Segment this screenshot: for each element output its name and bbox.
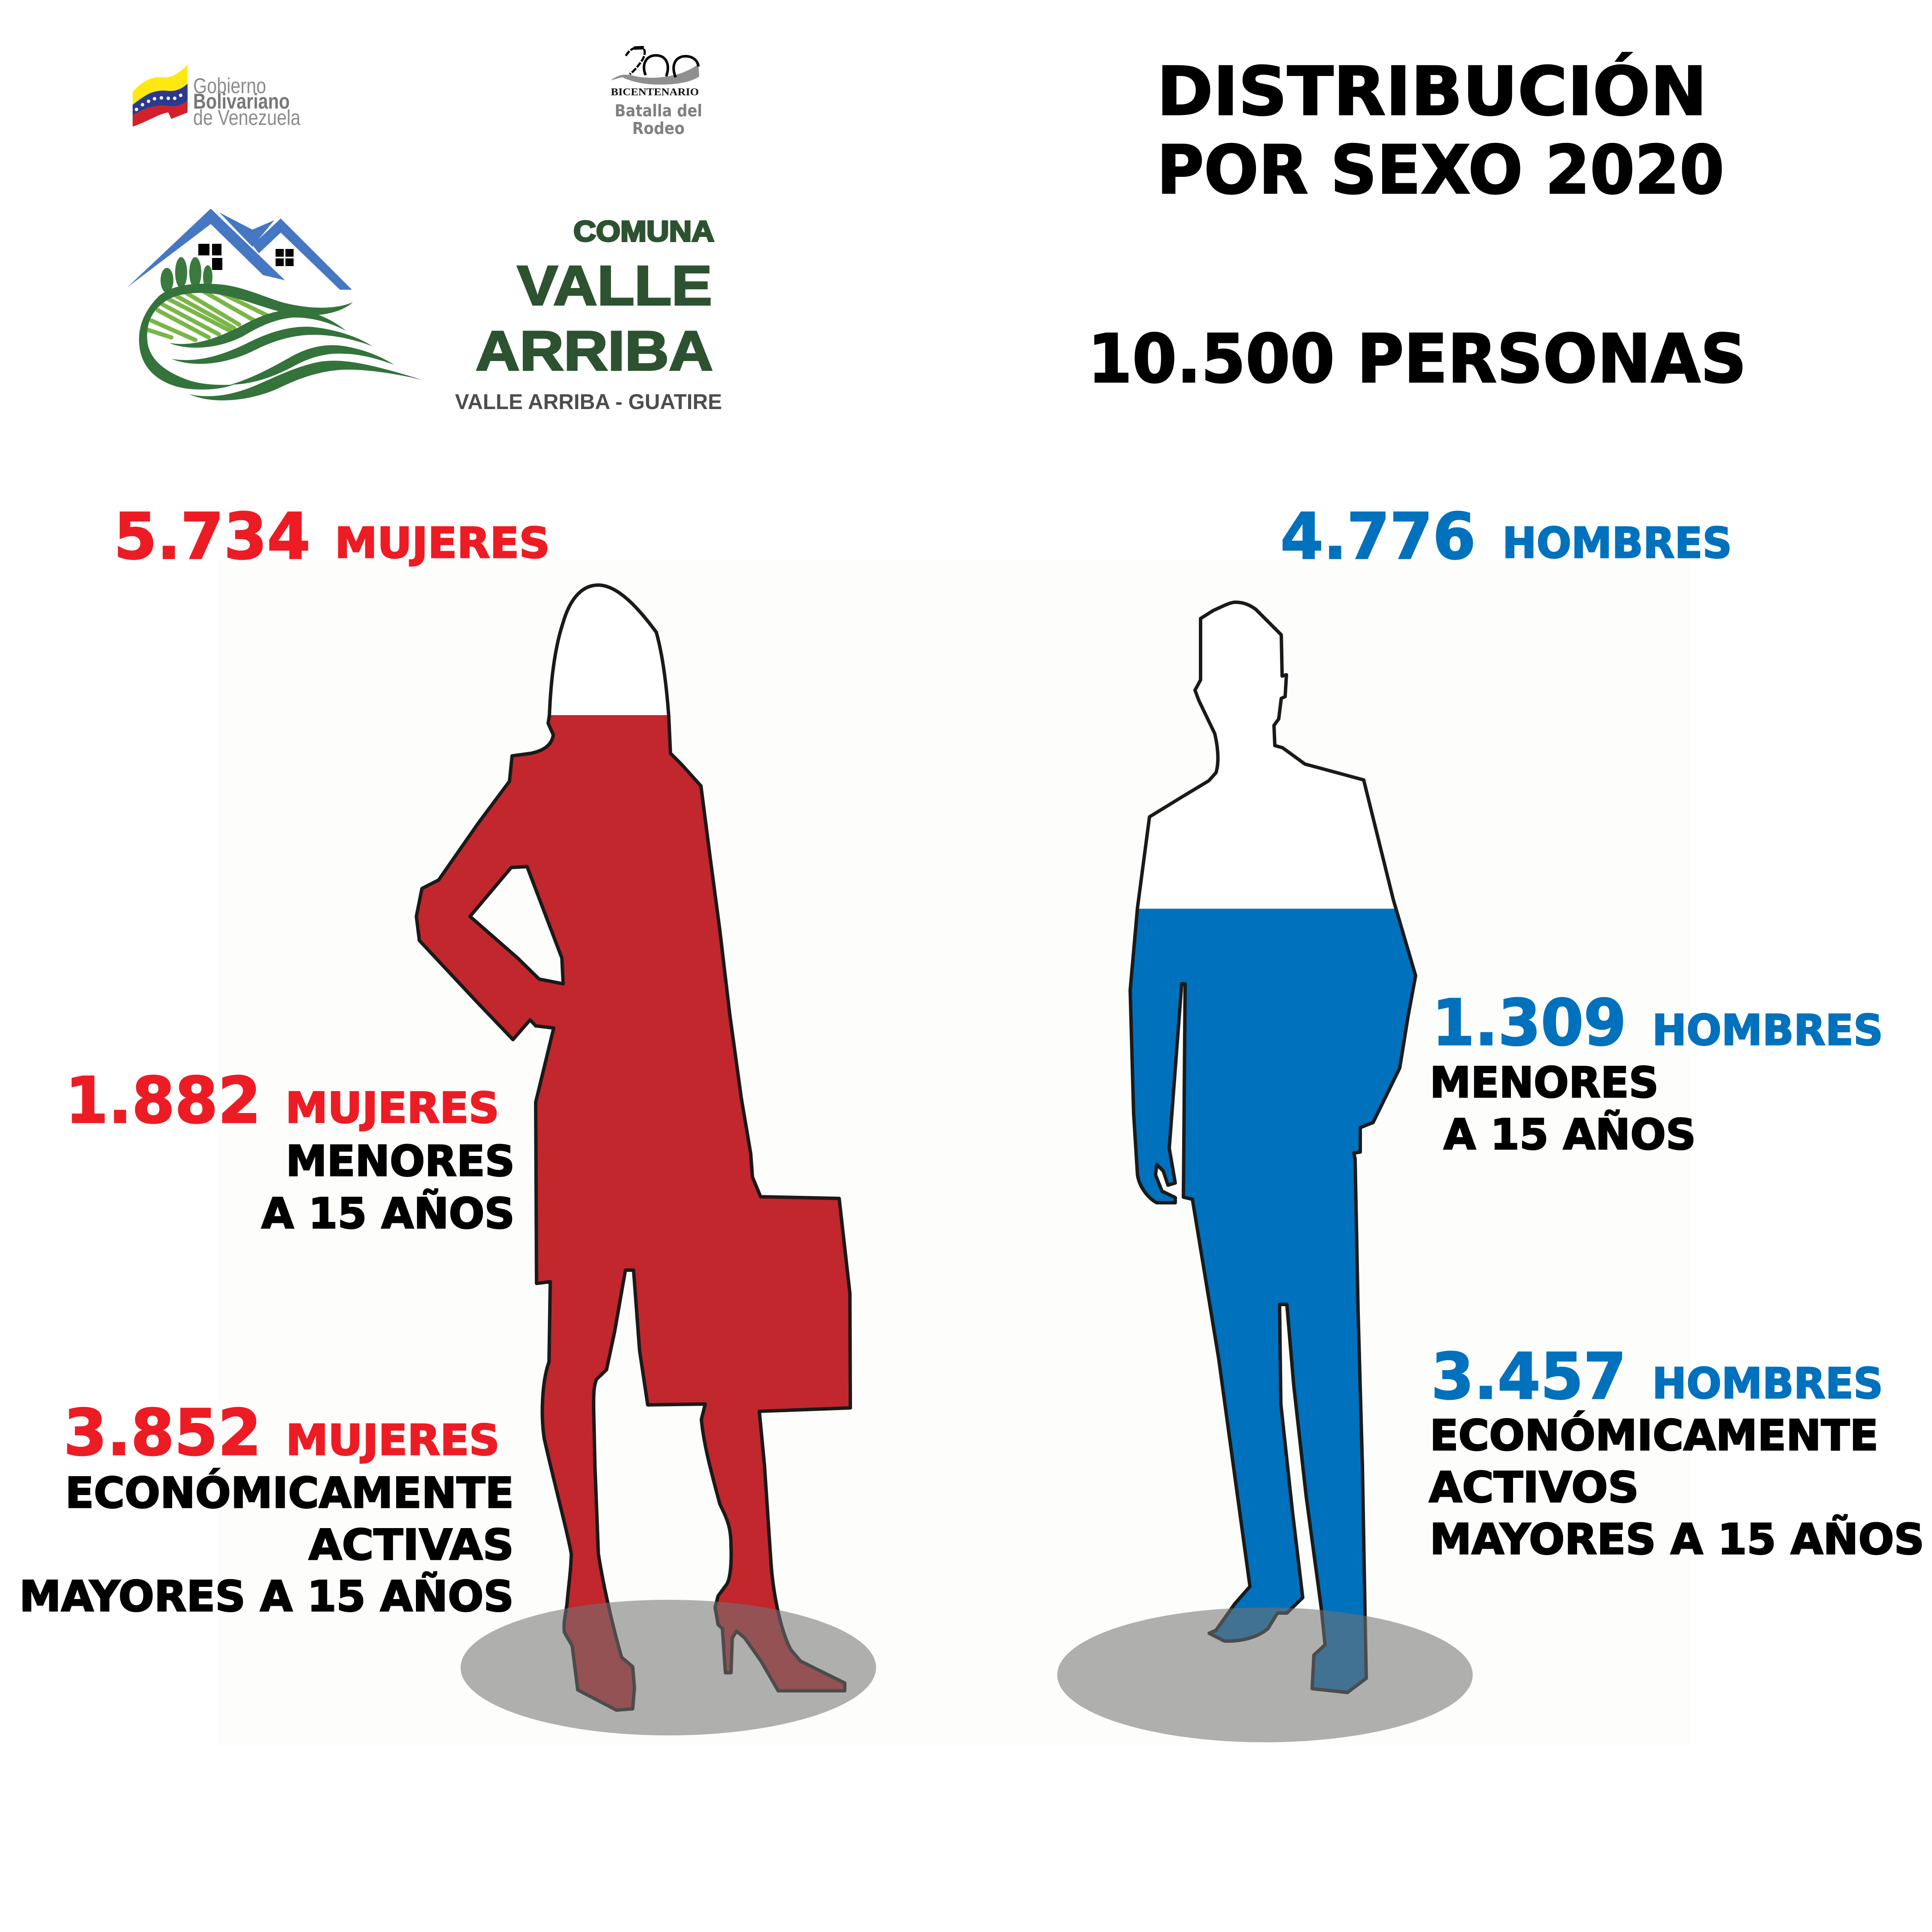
- woman ground shadow: [461, 1600, 876, 1735]
- heading: women total: 5.734: [114, 500, 310, 573]
- callout: economically active men: ECONÓMICAMENTE: [1430, 1410, 1878, 1460]
- icon: waving Venezuelan flag: [133, 64, 188, 127]
- callout: economically active women: MUJERES: [286, 1416, 500, 1465]
- bicentenario wordmark: BICENTENARIO: [611, 87, 699, 98]
- title: DISTRIBUCIÓN: [1157, 52, 1707, 130]
- icon: houses and fields: [127, 209, 423, 400]
- heading: women total: [114, 500, 550, 573]
- callout: economically active women: ECONÓMICAMENTE: [65, 1468, 514, 1518]
- callout: economically active women: ACTIVAS: [309, 1521, 514, 1570]
- icon: 200 swoosh: [611, 47, 699, 85]
- government name text: Bolivariano: [193, 89, 290, 113]
- Batalla del Rodeo text: Rodeo: [632, 119, 685, 138]
- background panel: [218, 559, 1691, 1746]
- VALLE heading: VALLE: [517, 254, 712, 317]
- house roofs: [127, 209, 352, 290]
- callout: men under 15: 1.309: [1432, 986, 1626, 1060]
- callout: economically active men: 3.457: [1431, 1340, 1626, 1413]
- heading: men total: HOMBRES: [1502, 519, 1732, 568]
- house windows: [198, 244, 294, 270]
- callout: economically active men: ACTIVOS: [1429, 1463, 1639, 1512]
- logo: Gobierno Bolivariano de Venezuela: [133, 64, 300, 130]
- man fill level: [1132, 909, 1414, 1691]
- callout: economically active women: MAYORES A 15 AÑOS: [19, 1571, 514, 1621]
- callout: economically active women: [19, 1396, 514, 1621]
- heading: men total: 4.776: [1280, 500, 1476, 573]
- callout: men under 15: [1430, 986, 1883, 1159]
- callout: economically active men: HOMBRES: [1652, 1359, 1883, 1408]
- figure: woman silhouette: [416, 585, 876, 1735]
- callout: economically active men: MAYORES A 15 AÑOS: [1430, 1514, 1924, 1564]
- callout: men under 15: MENORES: [1430, 1059, 1659, 1107]
- callout: economically active women: 3.852: [64, 1396, 261, 1470]
- callout: women under 15: A 15 AÑOS: [261, 1189, 515, 1238]
- title: POR SEXO 2020: [1157, 131, 1724, 209]
- woman outline: [416, 585, 850, 1710]
- government name text: [193, 74, 300, 130]
- logo: Bicentenario Batalla del Rodeo: [611, 47, 702, 138]
- Batalla del Rodeo text: [615, 101, 702, 138]
- government name text: de Venezuela: [193, 106, 300, 130]
- callout: women under 15: [65, 1064, 515, 1238]
- heading: men total: [1280, 500, 1732, 573]
- COMUNA label: COMUNA: [573, 215, 714, 248]
- total population: 10.500 PERSONAS: [1088, 320, 1747, 398]
- light green crop rows: [147, 292, 270, 340]
- ARRIBA heading: ARRIBA: [476, 319, 713, 382]
- woman fill level: [418, 715, 849, 1708]
- callout: men under 15: A 15 AÑOS: [1444, 1110, 1696, 1159]
- callout: women under 15: MENORES: [286, 1137, 515, 1186]
- callout: women under 15: MUJERES: [285, 1084, 499, 1133]
- dark green waves: [139, 284, 423, 400]
- title: [1157, 52, 1724, 209]
- figure: man silhouette: [1057, 602, 1473, 1742]
- government name text: Gobierno: [193, 74, 266, 98]
- man ground shadow: [1057, 1607, 1473, 1742]
- logo: Comuna Valle Arriba: [127, 209, 722, 414]
- location subtitle: VALLE ARRIBA - GUATIRE: [455, 390, 722, 414]
- heading: women total: MUJERES: [335, 519, 550, 568]
- callout: men under 15: HOMBRES: [1652, 1006, 1883, 1055]
- callout: economically active men: [1429, 1340, 1924, 1564]
- cypress trees: [161, 257, 212, 293]
- man outline: [1130, 602, 1416, 1692]
- Batalla del Rodeo text: Batalla del: [615, 101, 702, 120]
- callout: women under 15: 1.882: [65, 1064, 261, 1137]
